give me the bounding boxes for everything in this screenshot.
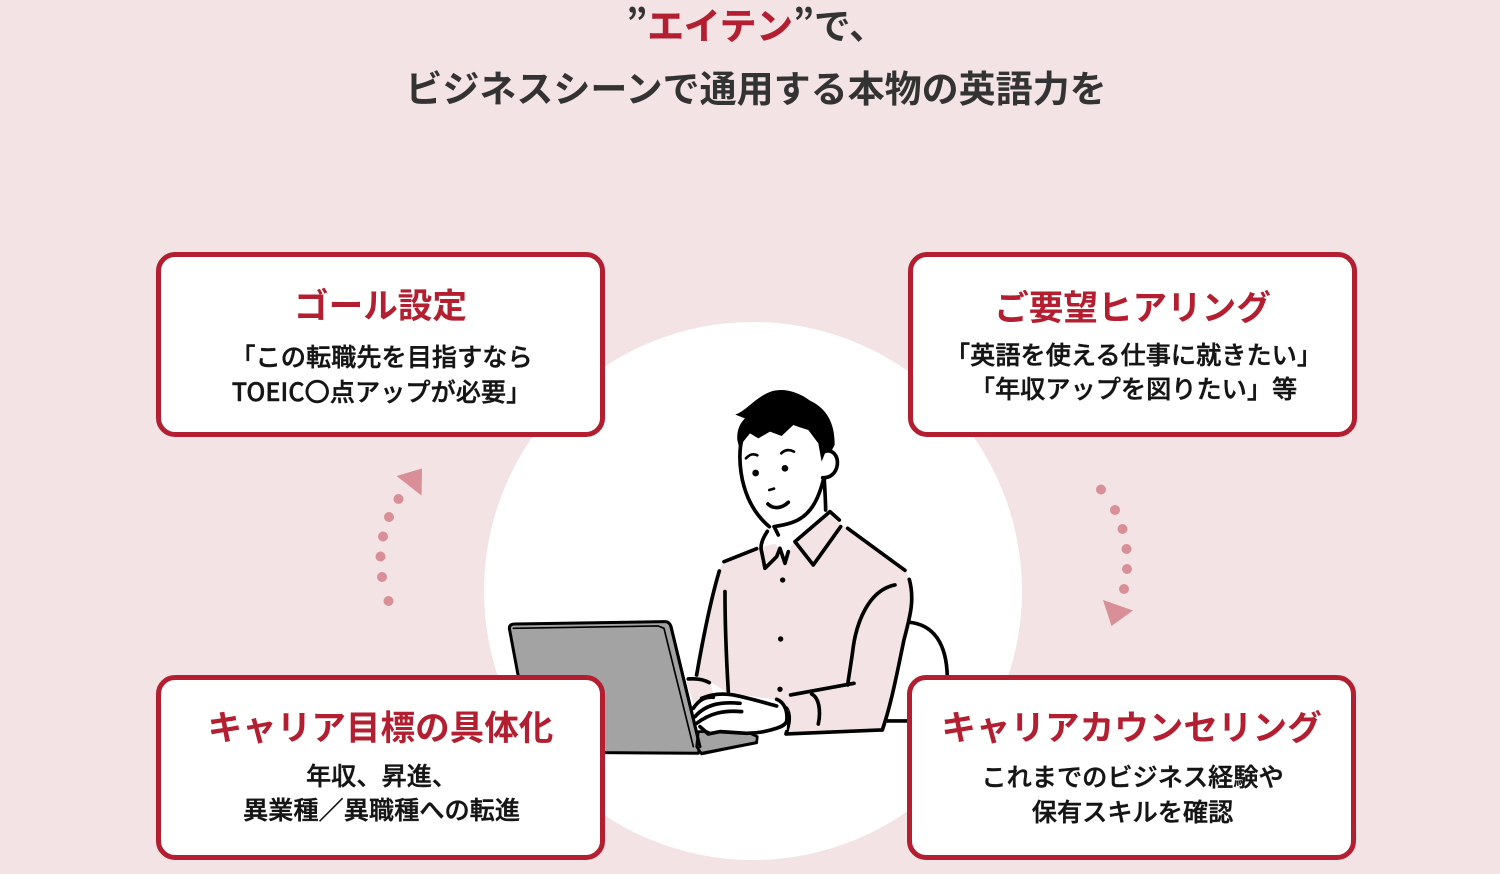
text: career counseling (981, 758, 1284, 829)
hand (687, 682, 788, 733)
shirt (687, 513, 913, 734)
collar (761, 512, 841, 568)
left dotted arrow (376, 468, 422, 606)
ear (823, 451, 837, 478)
text: career goal (243, 757, 520, 827)
panel: needs hearing (908, 252, 1357, 437)
text: needs hearing: 「英語を使える仕事に就きたい」 (945, 336, 1322, 372)
heading: career counseling: キャリアカウンセリング (941, 700, 1322, 750)
panel: career counseling (907, 675, 1356, 860)
laptop front edge redraw (671, 627, 757, 753)
text: goal setting (230, 338, 533, 409)
right dotted arrow (1096, 484, 1133, 626)
laptop base (697, 732, 757, 754)
text: career goal: 異業種／異職種への転進 (243, 791, 520, 827)
heading: career goal: キャリア目標の具体化 (208, 700, 553, 750)
eyebrows, eyes, nose, mouth (746, 450, 794, 490)
hair (735, 390, 835, 462)
text: goal setting: 「この転職先を目指すなら (230, 338, 533, 374)
text: career counseling: 保有スキルを確認 (1032, 793, 1233, 829)
text: needs hearing: 「年収アップを図りたい」等 (970, 370, 1297, 406)
background circle (484, 322, 1022, 860)
text: career goal: 年収、昇進、 (306, 757, 457, 793)
heading: needs hearing: ご要望ヒアリング (994, 280, 1271, 330)
text: career counseling: これまでのビジネス経験や (981, 758, 1284, 794)
panel: career goal (156, 675, 605, 860)
shirt outline (697, 528, 912, 734)
chair back (885, 622, 947, 721)
buttons (777, 577, 785, 692)
text: goal setting: TOEIC〇点アップが必要」 (232, 373, 531, 409)
text: needs hearing (945, 336, 1322, 406)
neck and white collar gap (773, 503, 830, 557)
laptop screen (509, 622, 700, 753)
title line 2: ビジネスシーンで通用する本物の英語力を (405, 59, 1107, 113)
panel: goal setting (156, 252, 605, 437)
face (742, 425, 823, 525)
heading: goal setting: ゴール設定 (294, 278, 467, 328)
